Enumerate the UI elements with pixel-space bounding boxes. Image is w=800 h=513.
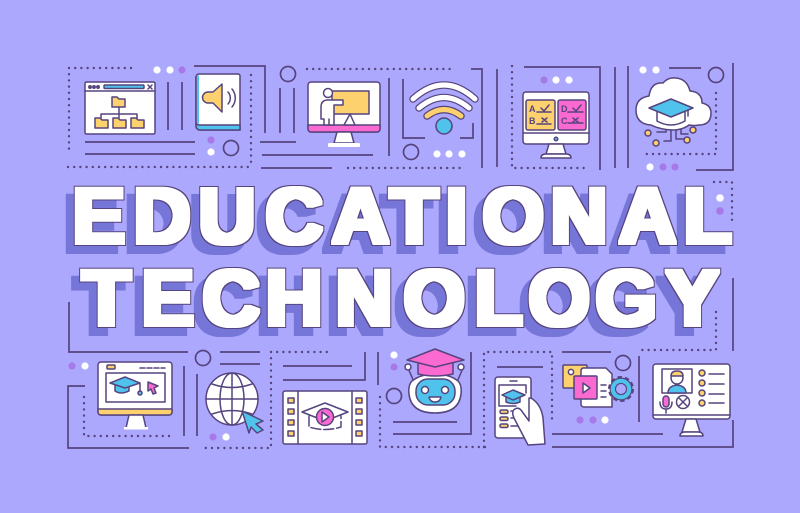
icon: video film strip <box>283 391 367 444</box>
icon: cloud graduation cap <box>636 78 711 146</box>
decorative dots and rings <box>68 66 724 441</box>
icon: media files and gear <box>563 365 632 407</box>
icon: quiz monitor: B <box>529 116 536 126</box>
icon: quiz monitor: D <box>561 104 568 114</box>
icon: video call monitor <box>653 364 730 436</box>
title: educational technology: TECHNOLOGY <box>82 253 719 342</box>
icon: e-learning monitor <box>98 362 172 430</box>
icon: quiz monitor <box>523 92 589 158</box>
title: educational technology: EDUCATIONAL <box>72 171 732 260</box>
icon: audio book <box>196 74 240 130</box>
title: educational technology <box>72 171 732 342</box>
icon: globe with cursor <box>206 373 263 433</box>
icon: teacher at screen <box>308 82 380 147</box>
icon: phone with hand <box>495 377 545 445</box>
icon: wifi signal <box>413 85 475 134</box>
icon: quiz monitor: A <box>529 104 536 114</box>
icon: folder tree window <box>85 82 155 134</box>
icon: quiz monitor: C <box>561 116 568 126</box>
icon: robot with graduation cap <box>405 349 464 413</box>
